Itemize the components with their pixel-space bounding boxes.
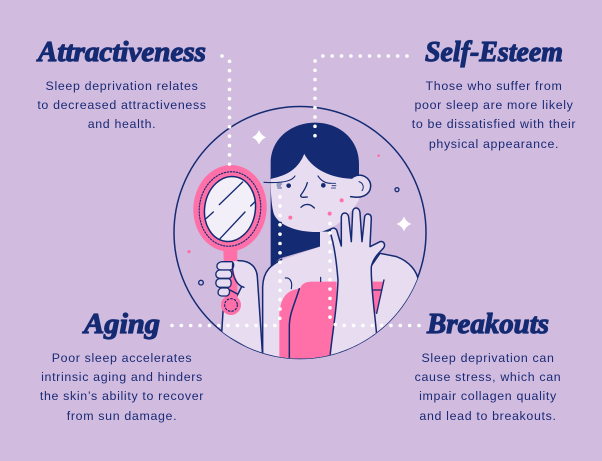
connector: breakouts — [330, 215, 419, 326]
face — [271, 153, 359, 232]
heading: Aging: Aging — [82, 308, 160, 340]
eyes — [286, 183, 291, 188]
text: aging body: Poor sleep accelerates — [52, 351, 192, 365]
text: self-esteem body: physical appearance. — [429, 137, 559, 151]
text: attractiveness body: and health. — [88, 117, 156, 131]
palm over handle — [233, 261, 256, 287]
right shoulder — [372, 252, 418, 334]
circle outline — [174, 106, 426, 358]
small rings — [395, 188, 399, 192]
towel — [279, 282, 337, 367]
text: attractiveness body: to decreased attractiveness — [37, 98, 207, 112]
heading: Attractiveness: Attractiveness — [36, 36, 206, 68]
illustration: woman with mirror in circle — [174, 106, 426, 367]
dotted connector lines — [172, 56, 419, 326]
fingers — [217, 262, 234, 270]
text: self-esteem body: Those who suffer from — [426, 79, 562, 93]
text: breakouts body: and lead to breakouts. — [419, 409, 557, 423]
text: aging body: from sun damage. — [67, 409, 177, 423]
hair strand and brows — [271, 153, 304, 178]
torso — [263, 232, 340, 367]
heading: Breakouts: Breakouts — [426, 308, 549, 340]
text: breakouts body: impair collagen quality — [419, 389, 557, 403]
nose and mouth — [301, 183, 314, 208]
text: attractiveness body: Sleep deprivation relates — [46, 79, 198, 93]
text: aging body: intrinsic aging and hinders — [41, 370, 203, 384]
text: aging body: the skin’s ability to recover — [40, 389, 204, 403]
text: self-esteem body: poor sleep are more likely — [414, 98, 574, 112]
pink strap — [373, 282, 384, 313]
mirror glass — [204, 176, 256, 242]
mirror handle — [223, 250, 237, 300]
mirror dotted ring — [198, 171, 262, 247]
sparkles — [252, 130, 266, 145]
mirror frame — [193, 165, 267, 251]
connector: aging — [172, 195, 280, 326]
hand and forearm — [330, 208, 385, 367]
blemishes — [288, 216, 292, 220]
back hair — [271, 123, 359, 267]
arm holding mirror — [222, 261, 263, 357]
connector: attractiveness — [222, 56, 230, 167]
ear — [352, 176, 370, 196]
heading: Self-Esteem: Self-Esteem — [425, 36, 563, 68]
text: breakouts body: Sleep deprivation can — [421, 351, 555, 365]
text: breakouts body: cause stress, which can — [415, 370, 561, 384]
figure — [187, 123, 419, 367]
connector: self-esteem — [315, 56, 407, 136]
text: self-esteem body: to be dissatisfied with their — [412, 117, 576, 131]
